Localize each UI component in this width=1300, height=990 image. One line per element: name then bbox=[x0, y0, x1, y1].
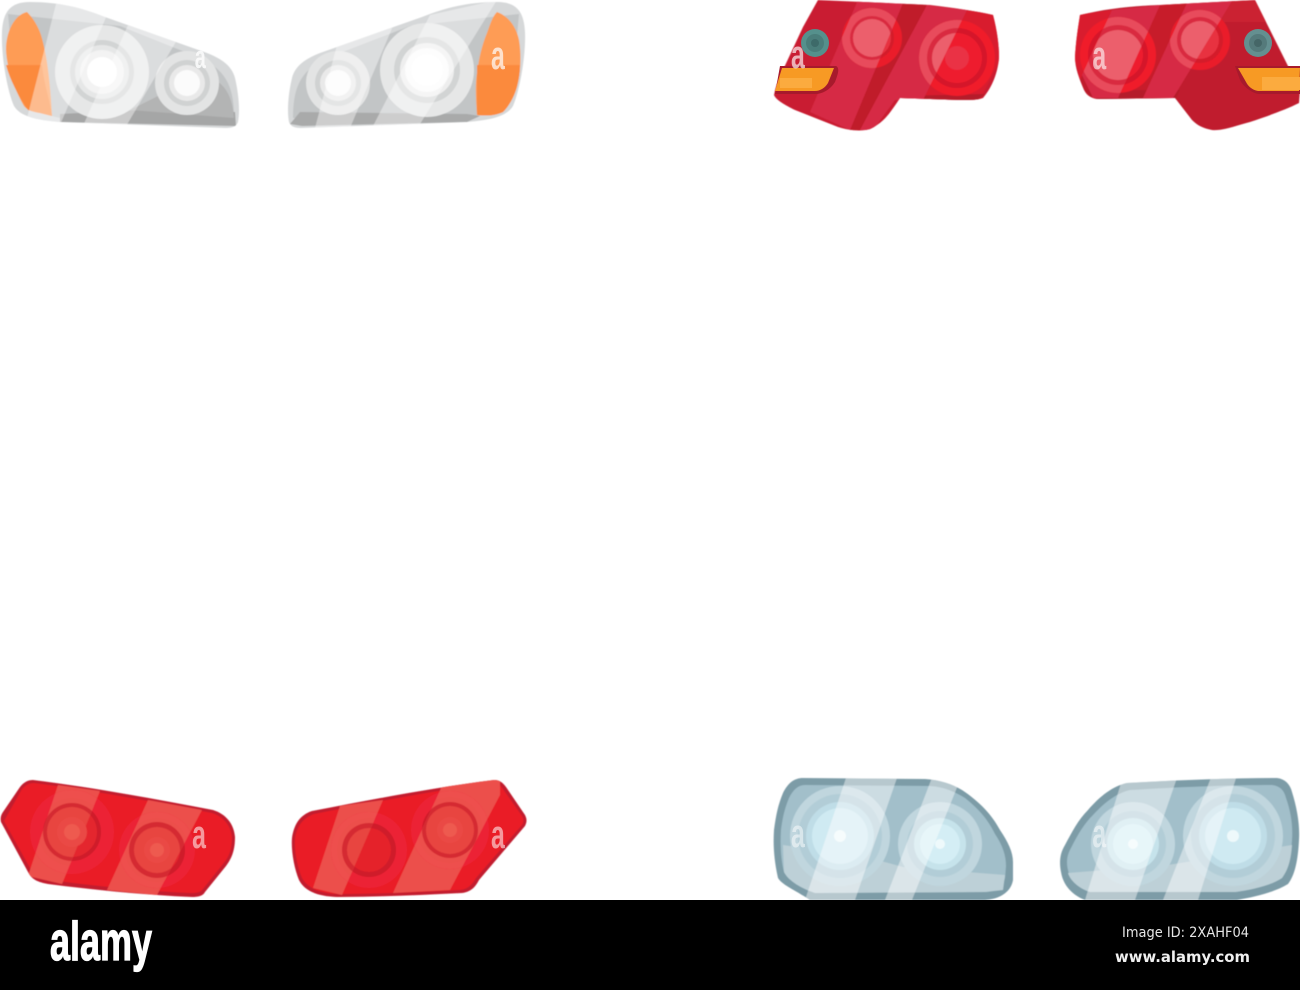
image id: Image ID: 2XAHF04 bbox=[1122, 925, 1249, 941]
watermark letter: a bbox=[192, 813, 206, 858]
watermark letter: a bbox=[195, 39, 206, 75]
blue headlight, bottom centre right bbox=[774, 775, 1013, 900]
blue headlight, bottom right bbox=[1060, 775, 1299, 900]
footer bar bbox=[0, 900, 1300, 990]
red tail light, top centre right bbox=[774, 0, 1000, 130]
watermark letter: a bbox=[791, 812, 805, 857]
watermark letter: a bbox=[491, 34, 505, 79]
watermark letter: a bbox=[491, 813, 505, 858]
watermark letter: a bbox=[1092, 812, 1107, 857]
website: www.alamy.com bbox=[1115, 948, 1250, 966]
watermark letter: a bbox=[1092, 34, 1107, 79]
amber reflector bbox=[1235, 66, 1300, 94]
indicator lamp bbox=[801, 29, 829, 57]
red tail light, top right bbox=[1075, 0, 1300, 130]
alamy logo: alamy bbox=[50, 910, 152, 972]
white headlight, top left bbox=[2, 0, 239, 128]
red tail light, bottom left bbox=[1, 780, 235, 897]
red tail light, bottom centre bbox=[292, 778, 526, 897]
amber reflector bbox=[775, 66, 838, 94]
white headlight, top centre bbox=[288, 0, 525, 128]
watermark letter: a bbox=[791, 33, 805, 78]
indicator lamp bbox=[1244, 29, 1272, 57]
